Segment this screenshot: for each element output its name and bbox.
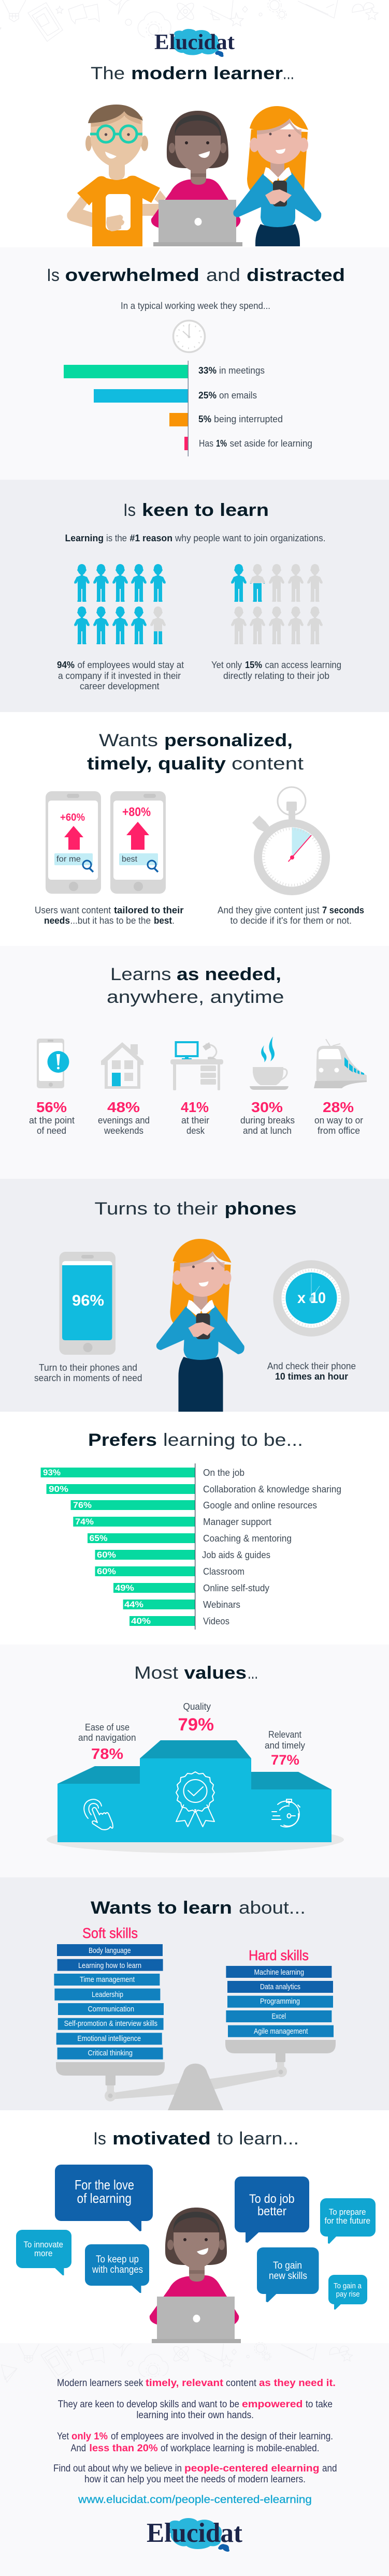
label: quality xyxy=(178,1701,214,1735)
closing text: timely, relevant xyxy=(146,2378,224,2389)
stack: soft skills: Self-promotion & interview skills xyxy=(64,2019,157,2028)
caption: 15 percent: Yet only xyxy=(211,660,242,670)
caption: tailored: needs xyxy=(44,915,70,926)
heading: ... xyxy=(248,1663,258,1683)
caption: 94 percent xyxy=(57,660,184,691)
stat: 56 percent: of need xyxy=(37,1126,66,1136)
bar chart: learning preferences: Online self-study xyxy=(203,1583,269,1593)
heading xyxy=(134,1663,258,1683)
label: ease of use: Ease of use xyxy=(85,1722,129,1733)
stat: 41 percent: desk xyxy=(186,1126,205,1136)
stat: 41 percent xyxy=(181,1099,209,1136)
bar chart: learning preferences xyxy=(41,1463,341,1630)
closing text: They are keen to develop skills and want to be xyxy=(58,2399,239,2410)
caption: tailored xyxy=(35,905,183,926)
heading: and xyxy=(206,265,240,285)
stack: soft skills: Time management xyxy=(80,1975,135,1984)
illustration: man with glasses xyxy=(67,105,166,246)
stack: hard skills: Excel xyxy=(271,2012,286,2021)
heading: keen to learn xyxy=(142,500,269,520)
bubble: to gain a pay rise: pay rise xyxy=(336,2290,360,2299)
stack: soft skills: Critical thinking xyxy=(88,2049,133,2057)
panel: footer xyxy=(2,2342,353,2552)
bubble: to gain new skills: new skills xyxy=(269,2271,307,2282)
pictogram: 94 percent xyxy=(74,564,166,644)
closing text: and xyxy=(322,2463,337,2474)
heading: timely, quality xyxy=(87,754,226,774)
phone: best +80% xyxy=(110,791,166,894)
closing text: Yet xyxy=(57,2431,69,2442)
bar chart: time spent: set aside for learning xyxy=(230,438,312,449)
stat: 41 percent: 41% xyxy=(181,1099,209,1115)
subheading xyxy=(65,533,325,543)
caption: 15 percent: directly relating to their job xyxy=(223,671,329,681)
bar chart: learning preferences: Classroom xyxy=(203,1566,244,1577)
phone: best +80%: +80% xyxy=(122,805,151,819)
bubble: for the love of learning xyxy=(55,2165,153,2231)
bar chart: learning preferences: On the job xyxy=(203,1468,244,1478)
bubble: to prepare for the future: To prepare xyxy=(329,2207,366,2217)
bar chart: learning preferences: Job aids & guides xyxy=(202,1550,270,1560)
caption: 94 percent: a company if it invested in their xyxy=(58,671,181,681)
stat: 28 percent: 28% xyxy=(323,1099,354,1115)
stack: hard skills: Machine learning xyxy=(254,1968,304,1977)
stat: 28 percent: on way to or xyxy=(314,1115,363,1126)
logo: Elucidat: Elucidat xyxy=(147,2518,242,2548)
stat: 30 percent: and at lunch xyxy=(243,1126,292,1136)
caption: search: Turn to their phones and xyxy=(39,1363,137,1373)
heading: Learns xyxy=(110,965,171,984)
bar chart: time spent: 25% xyxy=(198,390,217,401)
stat: 56 percent: 56% xyxy=(36,1099,67,1115)
illustration: woman with phone xyxy=(156,1239,244,1412)
caption: 10 times an hour: 10 times an hour xyxy=(275,1371,348,1382)
stack: soft skills: Body language xyxy=(89,1946,131,1955)
bar chart: time spent: Has xyxy=(199,438,213,449)
caption: 10 times an hour: And check their phone xyxy=(267,1361,356,1371)
caption: 7 seconds xyxy=(218,905,364,926)
bar chart: time spent: being interrupted xyxy=(214,414,283,424)
subheading: is the xyxy=(106,533,127,543)
caption: 7 seconds: 7 seconds xyxy=(322,905,364,915)
title: ... xyxy=(283,64,294,83)
closing text: less than 20% xyxy=(89,2443,158,2454)
label: quality: Quality xyxy=(183,1701,211,1712)
stat: 48 percent: 48% xyxy=(107,1099,140,1115)
icon: phone alert xyxy=(37,1039,69,1088)
caption: tailored: best xyxy=(154,915,172,926)
bubble: for the love of learning: For the love xyxy=(75,2177,134,2193)
phone: for me +60%: +60% xyxy=(60,812,85,823)
closing text: Find out about why we believe in xyxy=(53,2463,182,2474)
bubble: to gain new skills xyxy=(257,2247,319,2302)
bubble: to keep up with changes xyxy=(85,2244,149,2293)
stack: hard skills: Programming xyxy=(260,1997,300,2006)
illustration: woman with laptop xyxy=(151,111,242,246)
caption: tailored: tailored to their xyxy=(114,905,183,915)
bar chart: time spent xyxy=(64,361,312,456)
stack: hard skills: Data analytics xyxy=(260,1982,300,1991)
heading: soft skills: Soft skills xyxy=(82,1925,138,1941)
heading xyxy=(91,1898,306,1918)
icon: coffee cup xyxy=(250,1037,289,1090)
heading: as needed, xyxy=(177,965,281,984)
phone: best +80%: best xyxy=(122,855,138,864)
label: quality: 79% xyxy=(178,1715,214,1735)
caption: tailored: ...but it has to be the xyxy=(70,915,151,926)
heading: Is xyxy=(47,265,60,285)
closing text: Modern learners seek xyxy=(57,2378,143,2389)
panel: most values xyxy=(47,1663,344,1853)
icon: desk xyxy=(170,1041,223,1090)
bar chart: learning preferences: 40% xyxy=(131,1616,151,1626)
heading: to learn... xyxy=(217,2129,299,2149)
icon: award rosette xyxy=(176,1772,214,1827)
stat: 30 percent: during breaks xyxy=(240,1115,295,1126)
icon: clock x 10 xyxy=(273,1260,350,1337)
heading: motivated xyxy=(112,2129,211,2149)
panel: turns to phones xyxy=(34,1199,356,1412)
bar chart: time spent: 5% xyxy=(198,414,211,424)
bubble: to gain new skills: To gain xyxy=(273,2260,302,2271)
subheading: Learning xyxy=(65,533,104,543)
label: ease of use: and navigation xyxy=(78,1733,136,1743)
phone: 96 percent: 96% xyxy=(72,1292,104,1309)
heading: learning to be... xyxy=(163,1430,303,1450)
link: www.elucidat.com/people-centered-elearning xyxy=(78,2494,312,2506)
bar chart: learning preferences: 90% xyxy=(49,1484,68,1494)
illustration: woman with phone xyxy=(233,106,321,246)
heading: Is xyxy=(93,2129,106,2149)
panel: learns as needed xyxy=(29,965,367,1136)
bar chart: learning preferences: 76% xyxy=(73,1500,92,1510)
closing text: learning into their own hands. xyxy=(137,2410,254,2421)
stack: soft skills: Learning how to learn xyxy=(78,1961,141,1970)
label: relevant and timely: 77% xyxy=(271,1752,299,1768)
bubble: to keep up with changes: with changes xyxy=(92,2264,143,2275)
bar chart: learning preferences: Google and online resources xyxy=(203,1500,317,1511)
label: relevant and timely: and timely xyxy=(265,1740,305,1751)
icon: fast stopwatch xyxy=(272,1799,300,1827)
heading xyxy=(94,1199,296,1219)
closing text: as they need it. xyxy=(259,2378,336,2389)
label: ease of use xyxy=(78,1722,136,1763)
closing text: people-centered elearning xyxy=(184,2463,319,2474)
bubble: to prepare for the future: for the future xyxy=(324,2216,370,2226)
phone: 96 percent xyxy=(59,1252,116,1355)
bubble: to innovate more: more xyxy=(34,2248,53,2258)
panel: overwhelmed and distracted xyxy=(47,265,345,456)
caption: 94 percent: of employees would stay at xyxy=(78,660,184,670)
stack: hard skills xyxy=(226,1966,334,2037)
icon: house xyxy=(101,1042,143,1089)
stat: 56 percent: at the point xyxy=(29,1115,75,1126)
phone: for me +60%: for me xyxy=(56,855,81,864)
podium xyxy=(47,1740,344,1853)
doodle background xyxy=(2,2342,353,2382)
caption: search xyxy=(34,1363,142,1383)
heading: Wants xyxy=(99,731,158,750)
bubble: to prepare for the future xyxy=(320,2198,376,2244)
caption: 7 seconds: And they give content just xyxy=(218,905,319,915)
bar chart: learning preferences: 60% xyxy=(97,1566,116,1576)
logo: Elucidat: Elucidat xyxy=(154,31,235,54)
caption: 15 percent: 15% xyxy=(245,660,262,670)
caption: 94 percent: career development xyxy=(80,681,160,691)
caption: 15 percent: can access learning xyxy=(265,660,341,670)
closing text: empowered xyxy=(242,2399,302,2410)
panel: personalized content xyxy=(35,731,364,926)
heading: distracted xyxy=(247,265,345,285)
bar chart: learning preferences: Coaching & mentoring xyxy=(203,1533,292,1544)
doodle background xyxy=(0,0,378,43)
stat: 48 percent xyxy=(98,1099,150,1136)
panel: header xyxy=(0,0,378,246)
heading xyxy=(88,1430,303,1450)
panel: motivated to learn xyxy=(16,2129,376,2343)
stack: soft skills xyxy=(54,1944,164,2060)
bar chart: learning preferences: Webinars xyxy=(203,1600,240,1610)
panel: keen to learn xyxy=(57,500,341,691)
heading xyxy=(107,965,284,1007)
bar chart: learning preferences: 93% xyxy=(43,1468,61,1477)
closing text: how it can help you meet the needs of modern learners. xyxy=(84,2474,306,2485)
heading: about... xyxy=(239,1898,306,1918)
caption: search: search in moments of need xyxy=(34,1373,142,1383)
illustration: woman with laptop xyxy=(150,2208,241,2343)
caption: 10 times an hour xyxy=(267,1361,356,1382)
bubble: to keep up with changes: To keep up xyxy=(96,2254,139,2265)
stack: soft skills: Emotional intelligence xyxy=(77,2034,141,2043)
stat: 56 percent xyxy=(29,1099,75,1136)
bubble: to gain a pay rise xyxy=(328,2275,367,2309)
bar chart: time spent: in meetings xyxy=(219,365,265,376)
phone: for me +60% xyxy=(46,791,101,894)
bar chart: learning preferences: 65% xyxy=(89,1533,108,1543)
heading: Wants to learn xyxy=(91,1898,232,1918)
caption: tailored: Users want content xyxy=(35,905,111,915)
heading: anywhere, anytime xyxy=(107,987,284,1007)
stack: hard skills: Agile management xyxy=(254,2027,308,2036)
closing text: of workplace learning is mobile-enabled. xyxy=(161,2443,319,2454)
stack: soft skills: Communication xyxy=(88,2005,134,2014)
heading: Is xyxy=(123,500,136,520)
closing text: only 1% xyxy=(71,2431,108,2442)
illustration: balance scale xyxy=(56,2040,336,2110)
label: relevant and timely xyxy=(265,1729,305,1768)
bar chart: learning preferences: 74% xyxy=(75,1517,94,1527)
stat: 28 percent: from office xyxy=(318,1126,360,1136)
closing text: And xyxy=(70,2443,86,2454)
stat: 30 percent: 30% xyxy=(251,1099,283,1115)
bar chart: time spent: 33% xyxy=(198,365,217,376)
bar chart: learning preferences: Videos xyxy=(203,1616,229,1626)
heading xyxy=(47,265,345,285)
bubble: for the love of learning: of learning xyxy=(77,2190,132,2206)
heading: hard skills: Hard skills xyxy=(249,1947,309,1963)
heading: Turns to their xyxy=(94,1199,218,1219)
subheading: #1 reason xyxy=(129,533,172,543)
bar chart: time spent: 1% xyxy=(216,438,227,449)
heading xyxy=(93,2129,299,2149)
subheading: In a typical working week they spend... xyxy=(121,301,270,311)
icon: stopwatch 7 seconds xyxy=(252,787,330,895)
stat: 41 percent: at their xyxy=(181,1115,209,1126)
heading: values xyxy=(184,1663,247,1683)
heading: phones xyxy=(225,1199,296,1219)
caption: 7 seconds: to decide if it's for them or not. xyxy=(230,915,352,926)
bubble: to innovate more: To innovate xyxy=(24,2240,63,2249)
bubble: to gain a pay rise: To gain a xyxy=(334,2282,362,2290)
bubble: to do job better: To do job xyxy=(249,2192,295,2206)
panel: wants to learn about xyxy=(54,1898,336,2110)
stat: 48 percent: weekends xyxy=(104,1126,143,1136)
heading xyxy=(87,731,304,774)
subheading: why people want to join organizations. xyxy=(175,533,325,543)
pictogram: 15 percent xyxy=(231,564,323,644)
panel: prefers learning xyxy=(41,1430,341,1630)
heading: personalized, xyxy=(164,731,293,750)
bar chart: learning preferences: 49% xyxy=(115,1583,134,1593)
icon: touch hand xyxy=(84,1799,113,1830)
caption: 94 percent: 94% xyxy=(57,660,75,670)
caption: tailored: . xyxy=(172,915,175,926)
icon: clock x 10: 10 xyxy=(310,1290,326,1307)
bar chart: time spent: on emails xyxy=(219,390,257,401)
heading: content xyxy=(232,754,304,774)
title: The xyxy=(91,64,125,83)
bubble: to do job better: better xyxy=(257,2204,286,2218)
icon: train xyxy=(314,1039,367,1088)
stat: 48 percent: evenings and xyxy=(98,1115,150,1126)
bar chart: learning preferences: 60% xyxy=(97,1550,116,1560)
icon: clock xyxy=(173,321,205,352)
bubble: to do job better xyxy=(235,2177,309,2243)
closing text: to take xyxy=(306,2399,333,2410)
stat: 30 percent xyxy=(240,1099,295,1136)
title xyxy=(91,64,294,83)
stat: 28 percent xyxy=(314,1099,363,1136)
heading: Prefers xyxy=(88,1430,157,1450)
title: modern learner xyxy=(131,64,283,83)
label: ease of use: 78% xyxy=(91,1746,123,1763)
heading: overwhelmed xyxy=(65,265,199,285)
bubble: to innovate more xyxy=(16,2230,71,2275)
bar chart: learning preferences: Collaboration & knowledge sharing xyxy=(203,1484,341,1494)
heading: Most xyxy=(134,1663,179,1683)
closing text: of employees are involved in the design of their learning. xyxy=(111,2431,333,2442)
label: relevant and timely: Relevant xyxy=(268,1729,301,1740)
stack: soft skills: Leadership xyxy=(92,1990,123,1999)
closing text: content xyxy=(226,2378,257,2389)
icon: clock x 10: x xyxy=(297,1290,306,1307)
caption: 15 percent xyxy=(211,660,341,681)
bar chart: learning preferences: Manager support xyxy=(203,1517,271,1527)
closing text xyxy=(53,2378,337,2485)
bar chart: learning preferences: 44% xyxy=(124,1600,143,1609)
